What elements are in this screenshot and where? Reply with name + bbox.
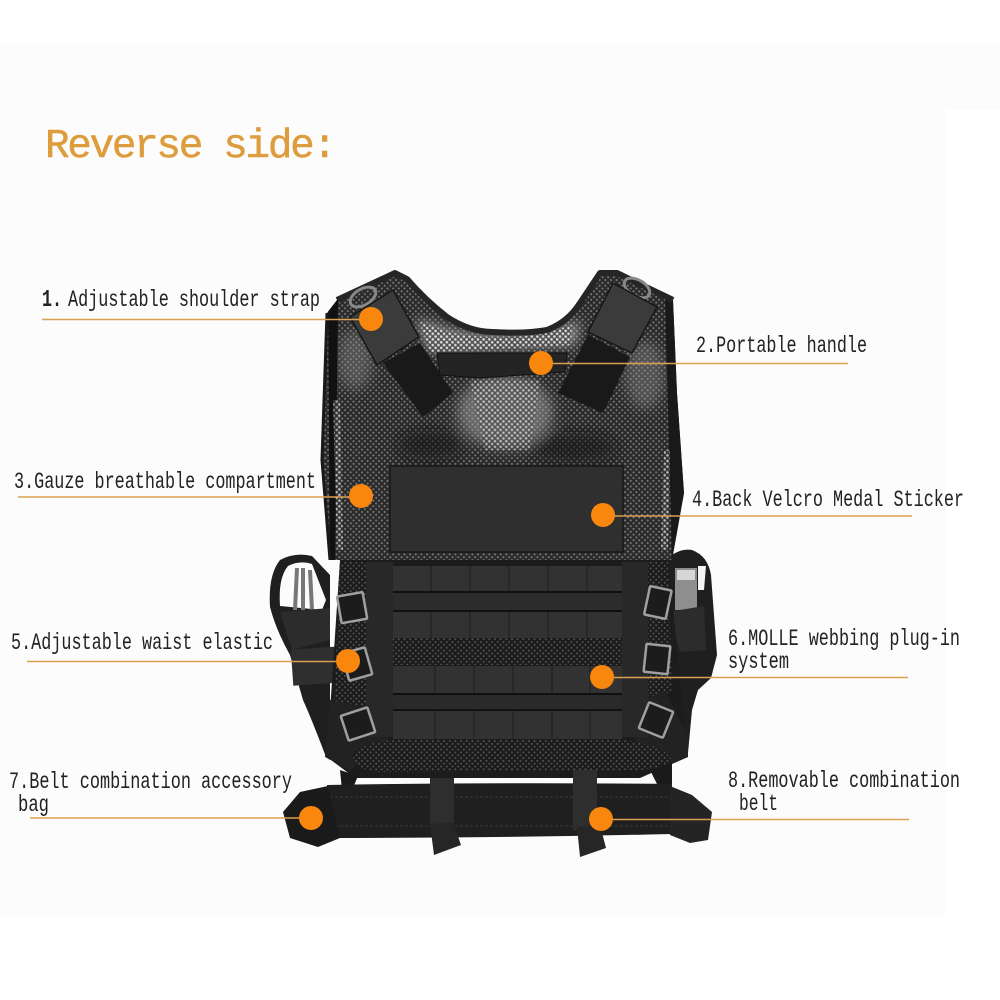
callout 8: removable combination belt: belt [739,791,778,817]
callout 6: MOLLE webbing plug-in system [590,626,960,689]
callout 8: removable combination belt [589,768,960,831]
vest photo illustration [270,273,717,857]
belt connectors [340,762,672,790]
callout 1: adjustable shoulder strap: Adjustable shoulder strap [68,287,320,313]
MOLLE webbing panel [366,562,648,739]
side mesh columns [334,562,672,712]
buckles [337,586,673,741]
lower mesh strip [327,560,688,778]
mesh vest body [322,273,686,560]
callout 7: belt combination accessory bag: bag [18,792,49,818]
portable handle [437,353,567,378]
removable belt [283,770,712,857]
callout 3: gauze breathable compartment: 3.Gauze breathable compartment [14,469,316,495]
waist wings [325,690,688,770]
bottom mesh [352,740,671,772]
left side pouch [270,555,343,760]
callout 1: adjustable shoulder strap [42,287,383,331]
callout 6: MOLLE webbing plug-in system: system [728,649,789,675]
callout 7: belt combination accessory bag: 7.Belt combination accessory [9,769,292,795]
callout 2: portable handle [529,333,867,375]
title: Reverse side: [45,124,337,170]
callout 1: adjustable shoulder strap: 1. [42,287,62,314]
callout 2: portable handle: 2.Portable handle [696,333,867,359]
callout 5: adjustable waist elastic: 5.Adjustable waist elastic [11,630,273,656]
callout 3: gauze breathable compartment [14,469,373,508]
velcro medal patch [390,466,623,552]
right shoulder strap [558,274,657,413]
callout 4: back velcro medal sticker [591,487,964,527]
callout 7: belt combination accessory bag [9,769,323,830]
right side pouch [660,550,717,753]
callout 5: adjustable waist elastic [11,630,360,673]
infographic: tactical vest reverse side [10,127,962,857]
left shoulder strap [347,283,453,417]
